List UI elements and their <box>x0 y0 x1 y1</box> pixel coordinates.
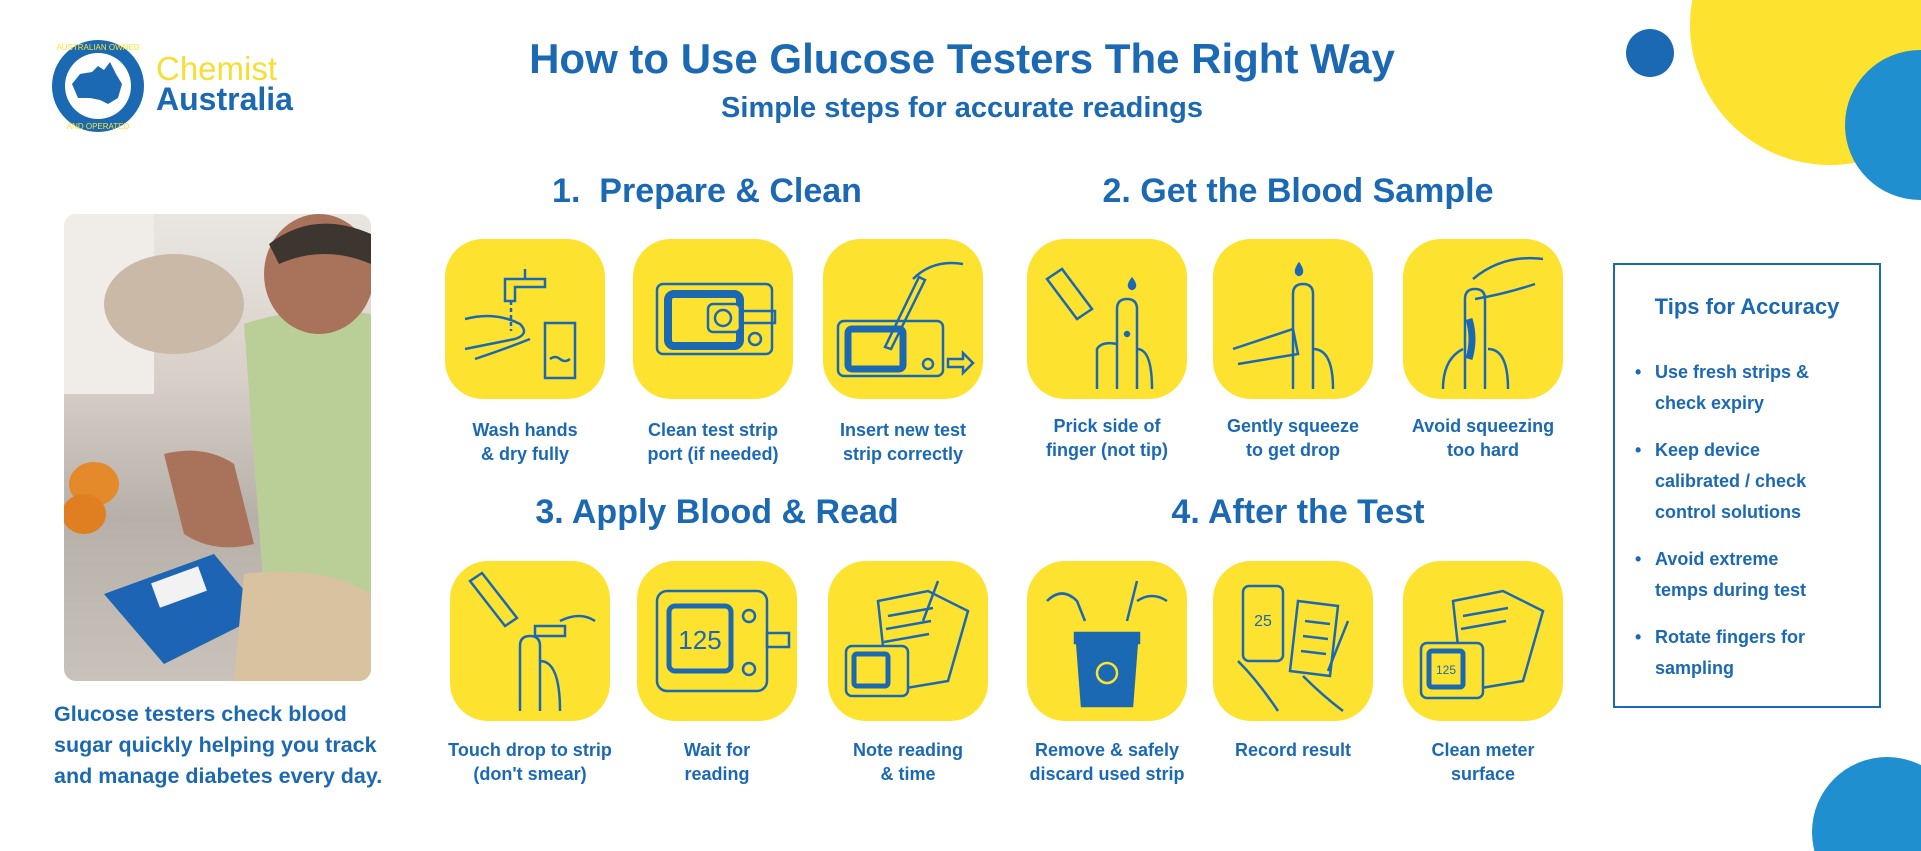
icon: clean meter <box>1403 561 1563 721</box>
text: Avoid squeezing <box>1412 416 1554 436</box>
icon: prick finger <box>1027 239 1187 399</box>
caption text: sugar quickly helping you track <box>54 733 377 757</box>
text: Insert new test <box>840 420 966 440</box>
labels row 2 <box>448 740 612 784</box>
labels row 2: (don't smear) <box>473 764 587 784</box>
text: reading <box>684 764 750 784</box>
caption text: Glucose testers check blood <box>54 702 347 726</box>
tips list: Rotate fingers for <box>1655 627 1805 647</box>
tips list <box>1636 362 1809 678</box>
text: Prick side of <box>1053 416 1161 436</box>
tips list: sampling <box>1655 658 1734 678</box>
heading 4: 4. After the Test <box>1171 493 1425 531</box>
text: Gently squeeze <box>1227 416 1359 436</box>
subtitle: Simple steps for accurate readings <box>721 92 1203 124</box>
icon: wash hands <box>445 239 605 399</box>
labels row 1 <box>472 420 578 464</box>
tips list: control solutions <box>1655 502 1801 522</box>
title: How to Use Glucose Testers The Right Way <box>529 35 1395 82</box>
text: Clean test strip <box>648 420 778 440</box>
panel: tips for accuracy <box>1613 263 1881 708</box>
icon: discard strip <box>1027 561 1187 721</box>
logo badge <box>52 40 144 132</box>
text: finger (not tip) <box>1046 440 1168 460</box>
icon: clean port <box>633 239 793 399</box>
text: discard used strip <box>1029 764 1185 784</box>
icon: touch drop <box>450 561 610 721</box>
labels row 2: Touch drop to strip <box>448 740 612 760</box>
text: surface <box>1451 764 1515 784</box>
text: Record result <box>1235 740 1351 760</box>
labels row 1: & dry fully <box>481 444 569 464</box>
text: Note reading <box>853 740 963 760</box>
icon: avoid squeezing <box>1403 239 1563 399</box>
icon: note reading <box>828 561 988 721</box>
tips list: Use fresh strips & <box>1655 362 1809 382</box>
logo text: Chemist <box>156 50 277 87</box>
text: to get drop <box>1246 440 1340 460</box>
text: Remove & safely <box>1035 740 1179 760</box>
logo badge: AUSTRALIAN OWNED <box>56 43 140 52</box>
text: & time <box>880 764 936 784</box>
tips list: calibrated / check <box>1655 471 1806 491</box>
caption text <box>54 702 382 788</box>
logo: Australia <box>156 81 293 117</box>
icon: record result: 25 <box>1254 613 1272 630</box>
text: too hard <box>1447 440 1519 460</box>
labels row 1: Wash hands <box>472 420 578 440</box>
logo <box>52 40 294 132</box>
icon: record result <box>1213 561 1373 721</box>
tips list: Keep device <box>1655 440 1760 460</box>
logo badge: AND OPERATED <box>67 122 129 131</box>
tips list: check expiry <box>1655 393 1764 413</box>
tips list: Avoid extreme <box>1655 549 1778 569</box>
heading 3: 3. Apply Blood & Read <box>535 493 899 531</box>
text: strip correctly <box>843 444 963 464</box>
icon: clean meter: 125 <box>1436 663 1456 677</box>
tips heading: Tips for Accuracy <box>1655 294 1839 319</box>
photo <box>64 214 371 681</box>
text: Clean meter <box>1431 740 1535 760</box>
icon: squeeze <box>1213 239 1373 399</box>
caption text: and manage diabetes every day. <box>54 764 382 788</box>
text: Wait for <box>684 740 750 760</box>
heading 1: 1. Prepare & Clean <box>552 172 862 210</box>
icon: wait reading meter <box>637 561 797 721</box>
tips list: temps during test <box>1655 580 1806 600</box>
icon: insert strip <box>823 239 983 399</box>
text: port (if needed) <box>648 444 778 464</box>
heading 2: 2. Get the Blood Sample <box>1102 172 1494 210</box>
icon: wait reading meter: 125 <box>678 625 722 655</box>
